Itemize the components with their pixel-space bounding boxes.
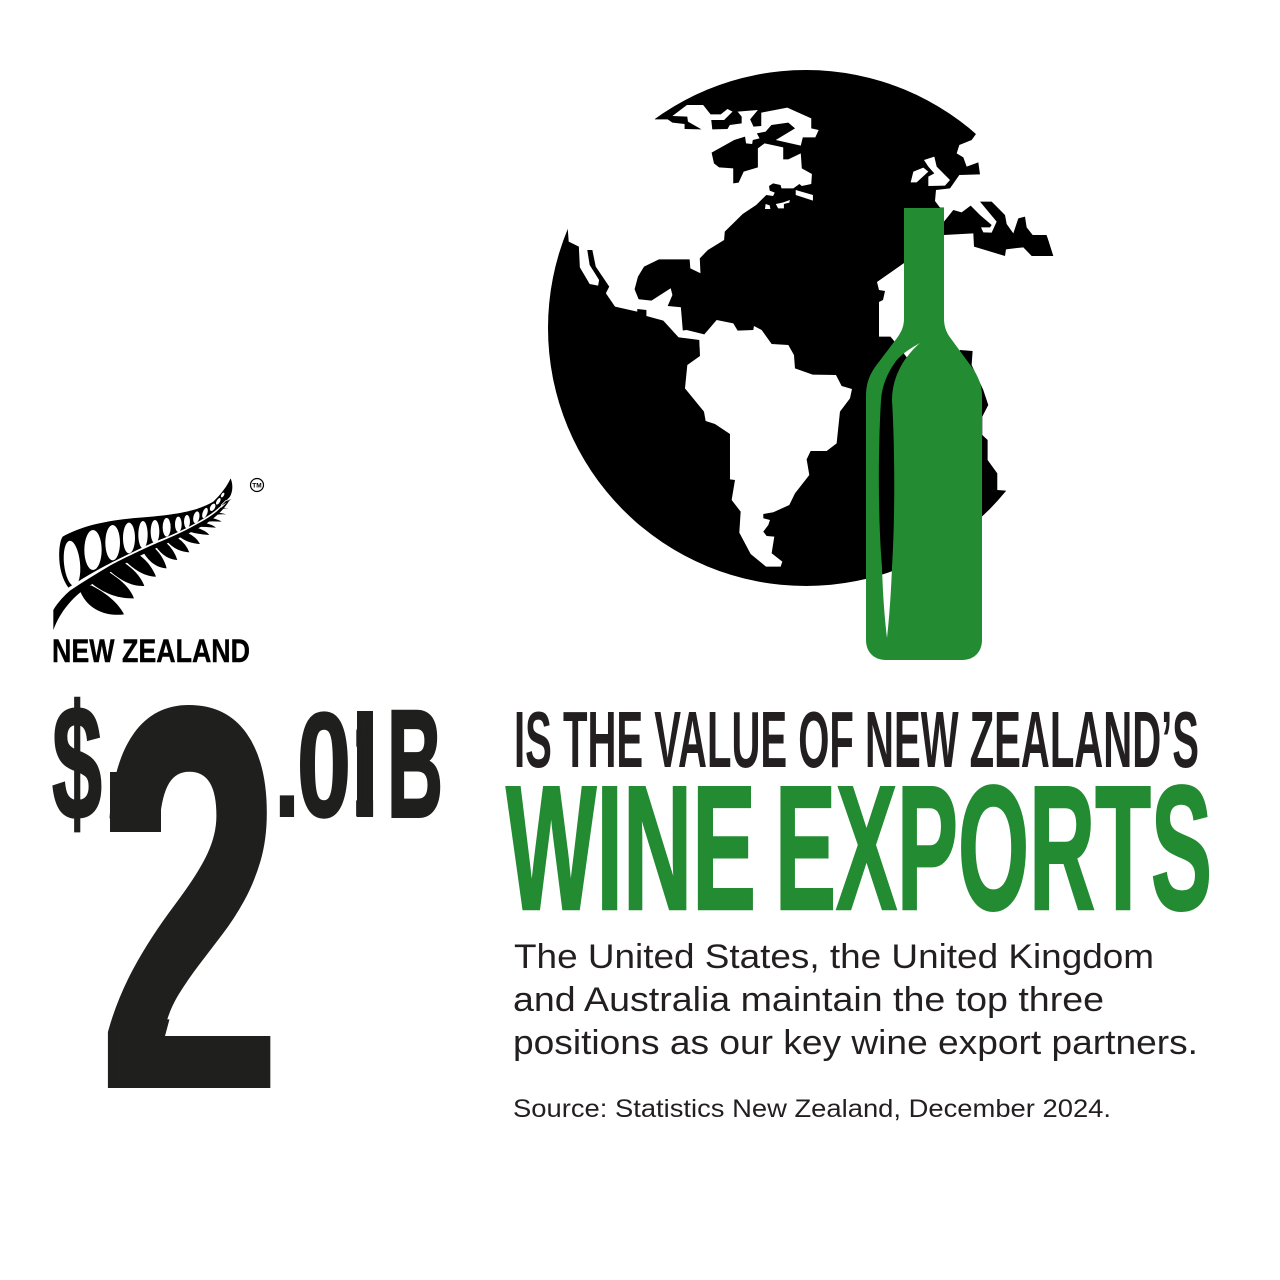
- heading: wine exports: [506, 749, 1212, 947]
- fern white leaflets: [62, 492, 225, 587]
- Scandinavia fragment: [924, 157, 950, 186]
- source note: Source: Statistics New Zealand, December 2024.: [513, 1095, 1111, 1123]
- logo: New Zealand silver fern: [52, 478, 264, 669]
- body text: [513, 938, 1198, 1062]
- icon: globe: [506, 27, 1133, 586]
- body text: positions as our key wine export partners.: [513, 1024, 1198, 1062]
- numeral 2: [99, 598, 281, 1198]
- icon: green wine bottle: [866, 208, 982, 660]
- North Africa: [877, 233, 1133, 337]
- North and Central America landmass: [506, 27, 819, 347]
- Caribbean islands: [796, 190, 813, 201]
- heading: wine exports: WINE: [506, 749, 756, 947]
- body text: The United States, the United Kingdom: [514, 938, 1154, 976]
- big number: $2.01B: [52, 598, 443, 1198]
- South America: [673, 320, 852, 567]
- body text: and Australia maintain the top three: [513, 981, 1104, 1019]
- fern stem: [53, 499, 230, 630]
- digit 1: [354, 683, 374, 848]
- fern lower leaflets: [81, 499, 232, 615]
- trademark symbol: [250, 478, 264, 492]
- digit 0: 0: [297, 683, 351, 848]
- decimal point: .: [273, 686, 301, 848]
- billion B: B: [387, 678, 443, 850]
- dollar sign: $: [52, 671, 102, 854]
- British Isles: [911, 168, 928, 182]
- Southern Africa: [879, 303, 1107, 533]
- numeral 2: 2: [99, 598, 281, 1198]
- fern upper frond: [59, 478, 232, 588]
- Europe and Asia: [935, 87, 1133, 260]
- big number: $2.01B: 1: [354, 683, 374, 848]
- trademark symbol: TM: [252, 482, 262, 490]
- logo wordmark: NEW ZEALAND: [52, 633, 250, 669]
